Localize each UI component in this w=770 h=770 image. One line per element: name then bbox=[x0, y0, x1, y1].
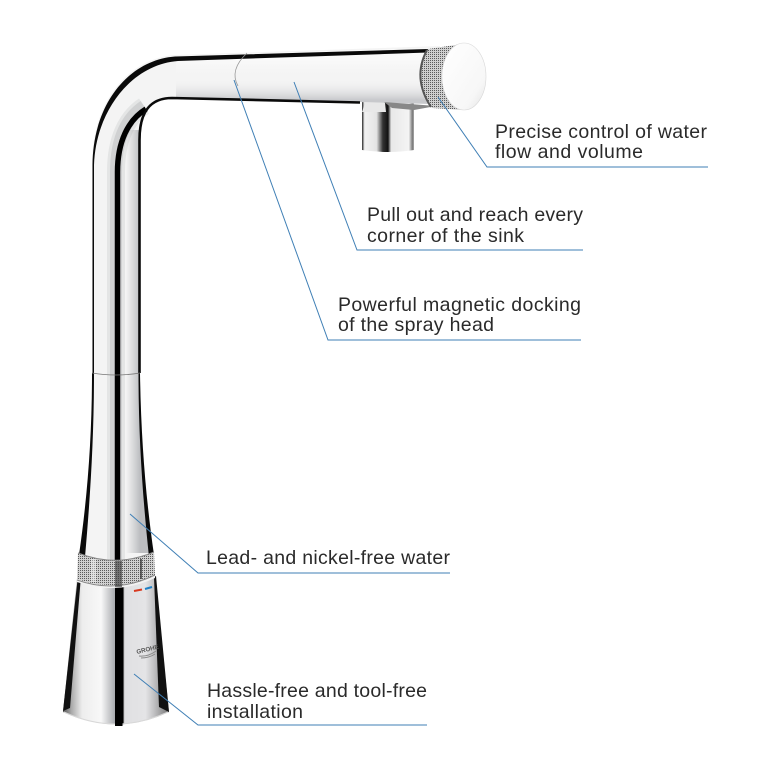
underside collar shadow bbox=[384, 102, 436, 110]
callout text: Lead- and nickel-free water bbox=[206, 547, 450, 569]
arm shading bbox=[176, 48, 430, 104]
spout neck under the arm bbox=[362, 94, 386, 112]
leader line bbox=[234, 80, 581, 340]
callout text: Powerful magnetic docking bbox=[338, 294, 581, 316]
ring left reflection bbox=[91, 559, 96, 582]
GROHE logo: GROHE bbox=[136, 644, 160, 656]
callout text: Hassle-free and tool-free bbox=[207, 680, 427, 702]
control knob cap bbox=[442, 43, 486, 110]
white band under ring bbox=[77, 574, 155, 588]
ring right reflection bbox=[140, 559, 142, 579]
callout: installation: installation bbox=[207, 701, 303, 723]
callout: pull out bbox=[294, 82, 583, 250]
left taper dark edge bbox=[79, 373, 94, 557]
left base dark wedge bbox=[63, 580, 80, 711]
callout: installation bbox=[134, 674, 427, 725]
callout text: Pull out and reach every bbox=[367, 204, 583, 226]
callout: water flow control bbox=[438, 97, 708, 167]
red hot marker bbox=[134, 590, 142, 591]
mixer base cone bbox=[63, 576, 169, 724]
right taper dark edge bbox=[138, 373, 154, 557]
knurled temperature ring bbox=[77, 552, 155, 585]
callout: magnetic docking: of the spray head bbox=[338, 314, 494, 336]
spout outlet bbox=[362, 100, 414, 152]
callout: lead-free bbox=[130, 514, 450, 573]
knurled control ring bbox=[421, 44, 462, 110]
chrome collar bbox=[420, 50, 431, 107]
callout: magnetic docking bbox=[234, 80, 581, 340]
tube joint line bbox=[92, 373, 140, 375]
leader line bbox=[294, 82, 583, 250]
callout text: Precise control of water bbox=[495, 121, 708, 143]
centre reflection stripe with soft falloff bbox=[116, 106, 146, 565]
leader line bbox=[134, 674, 427, 725]
leader line bbox=[438, 97, 708, 167]
callout: pull out: corner of the sink bbox=[367, 225, 524, 247]
faucet illustration bbox=[63, 43, 486, 726]
leader line bbox=[130, 514, 450, 573]
callout: water flow control: flow and volume bbox=[495, 141, 643, 163]
centre stripe on base bbox=[115, 585, 122, 726]
logo wave mark bbox=[139, 651, 156, 658]
outer reflection band: top arm and elbow bbox=[92, 49, 428, 373]
centre reflection on ring bbox=[115, 561, 122, 587]
ring edge lines bbox=[77, 552, 155, 586]
inner reflection band: underside and right edge bbox=[140, 98, 360, 373]
right body shading bbox=[126, 130, 152, 553]
spray head seam bbox=[235, 53, 247, 86]
base bottom rim highlight bbox=[64, 712, 168, 724]
right base dark wedge bbox=[154, 576, 169, 712]
blue cold marker bbox=[145, 587, 152, 589]
faucet body silhouette bbox=[79, 46, 440, 562]
